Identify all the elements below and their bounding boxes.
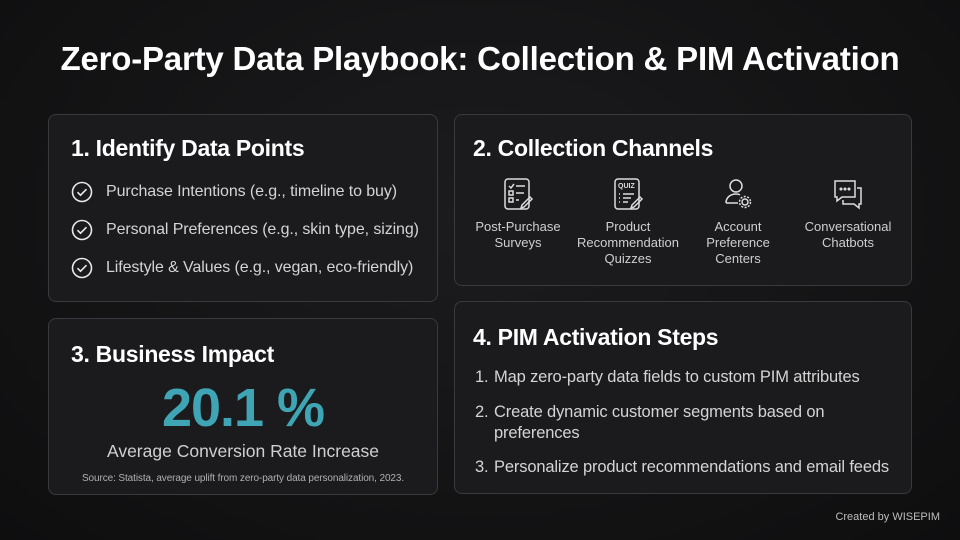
heading: 1. Identify Data Points [71,135,304,161]
item: lifestyle values: Lifestyle & Values (e.g., vegan, eco-friendly) [106,259,413,276]
heading: 4. PIM Activation Steps [473,324,718,350]
heading: 2. Collection Channels [473,135,713,161]
heading: 3. Business Impact [71,341,274,367]
step 2 [475,403,824,442]
title: Zero-Party Data Playbook: Collection & PIM Activation [60,40,900,77]
channel: chatbots [805,180,891,250]
step 2: Create dynamic customer segments based on [494,403,824,421]
channel: quizzes [577,178,679,266]
channel: account preference: Account Preference Centers [706,219,770,266]
stat: 20.1%: 20.1 % [162,378,324,438]
panel: collection channels [454,114,912,286]
item: personal preferences: Personal Preferences (e.g., skin type, sizing) [106,221,419,238]
step 3: 3. [475,458,488,476]
step 2: 2. [475,403,488,421]
channel: surveys [475,178,561,250]
channel: quizzes: Product Recommendation Quizzes [577,219,679,266]
stat label: Average Conversion Rate Increase [107,441,379,461]
channel: quizzes: QUIZ [618,183,635,190]
item: purchase intentions: Purchase Intentions (e.g., timeline to buy) [106,183,397,200]
panel: identify data points [48,114,438,302]
step 3: Personalize product recommendations and email feeds [494,458,889,476]
footer credit: Created by WISEPIM [835,511,940,523]
panel: business impact [48,318,438,495]
step 2: preferences [494,424,579,442]
channel: account preference [706,179,770,266]
step 1: Map zero-party data fields to custom PIM attributes [494,368,860,386]
step 1: 1. [475,368,488,386]
channel: chatbots: Conversational Chatbots [805,219,891,250]
source: Source: Statista, average uplift from zero-party data personalization, 2023. [82,473,404,484]
panel: PIM activation steps [454,301,912,494]
channel: surveys: Post-Purchase Surveys [475,219,561,250]
